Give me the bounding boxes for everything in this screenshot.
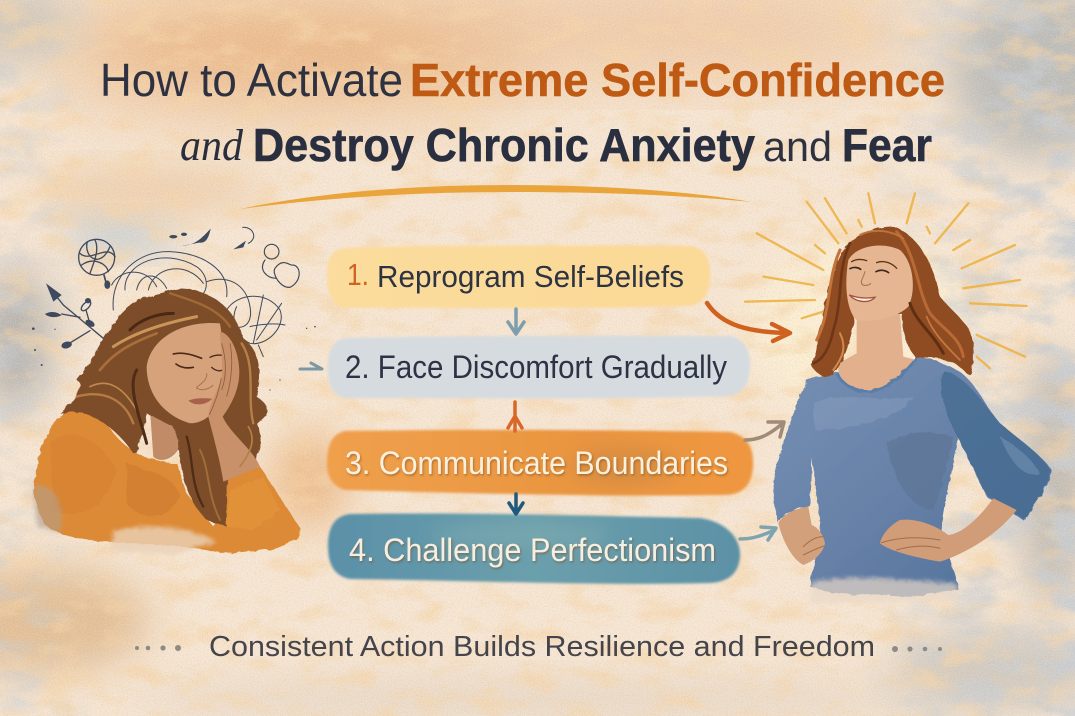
step 3: Communicate Boundaries: 3. Communicate Boundaries: [345, 445, 728, 481]
footer dots right: [892, 646, 942, 652]
face: [846, 246, 913, 321]
arrow: step 1 to confident woman: [707, 303, 790, 341]
step 2: Face Discomfort Gradually: [328, 336, 750, 398]
arrow: step 3 to 4: [509, 494, 523, 514]
step 2: Face Discomfort Gradually: 2. Face Discomfort Gradually: [345, 349, 727, 385]
shirt: [773, 357, 1052, 603]
arrows: [300, 303, 790, 540]
footer dots left: [135, 645, 181, 651]
ink specks: [32, 326, 316, 391]
arrow: stress to step 2: [300, 363, 322, 369]
step 1: Reprogram Self-Beliefs: Reprogram Self-Beliefs: [377, 259, 684, 294]
title line 2: Destroy Chronic Anxiety: [253, 119, 755, 171]
step 1: Reprogram Self-Beliefs: [327, 246, 710, 308]
hair back: [60, 288, 267, 527]
orange sweater: [33, 408, 302, 555]
step 4: Challenge Perfectionism: 4. Challenge Perfectionism: [349, 532, 716, 568]
step 1: Reprogram Self-Beliefs: 1.: [347, 257, 369, 292]
neck and chest: [838, 313, 917, 390]
hand and forearm: [208, 332, 260, 482]
hair strands: [813, 231, 963, 370]
face: [147, 323, 227, 423]
arrow: step 3 to 2: [508, 402, 522, 431]
title line 1: [100, 54, 945, 106]
step 4: Challenge Perfectionism: [328, 513, 740, 584]
title: [100, 54, 945, 209]
title line 1: Extreme Self-Confidence: [410, 54, 945, 106]
figure: confident woman: [745, 193, 1052, 603]
icon: linked loops: [263, 244, 299, 287]
hair strands: [77, 293, 253, 520]
footer tagline: Consistent Action Builds Resilience and Freedom: [209, 631, 875, 663]
icon: scribble ball: [79, 239, 115, 288]
title line 2: and: [763, 123, 832, 170]
icon: leaf marks top: [169, 227, 254, 249]
hair: [809, 226, 973, 377]
step 3: Communicate Boundaries: [327, 430, 753, 496]
icon: leaf branch: [45, 283, 103, 350]
icon: tangled scribbles: [112, 252, 285, 357]
steps: [327, 246, 753, 584]
sun rays: [745, 193, 1027, 368]
title line 2: Fear: [842, 119, 932, 171]
facial features: [849, 259, 897, 302]
title underline: [240, 185, 752, 209]
forearms and hands: [778, 507, 825, 565]
arrow: step 3 to confident woman: [745, 422, 784, 440]
eyebrows and eyes: [173, 353, 225, 371]
arrow: step 4 to confident woman: [740, 527, 776, 540]
neck: [150, 410, 187, 460]
title line 1: How to Activate: [100, 54, 403, 106]
title line 2: and: [180, 121, 244, 170]
scribble doodles: [32, 227, 316, 391]
arrow: step 1 to 2: [508, 309, 524, 334]
nose and mouth: [188, 373, 213, 404]
figure: stressed woman: [33, 288, 302, 555]
